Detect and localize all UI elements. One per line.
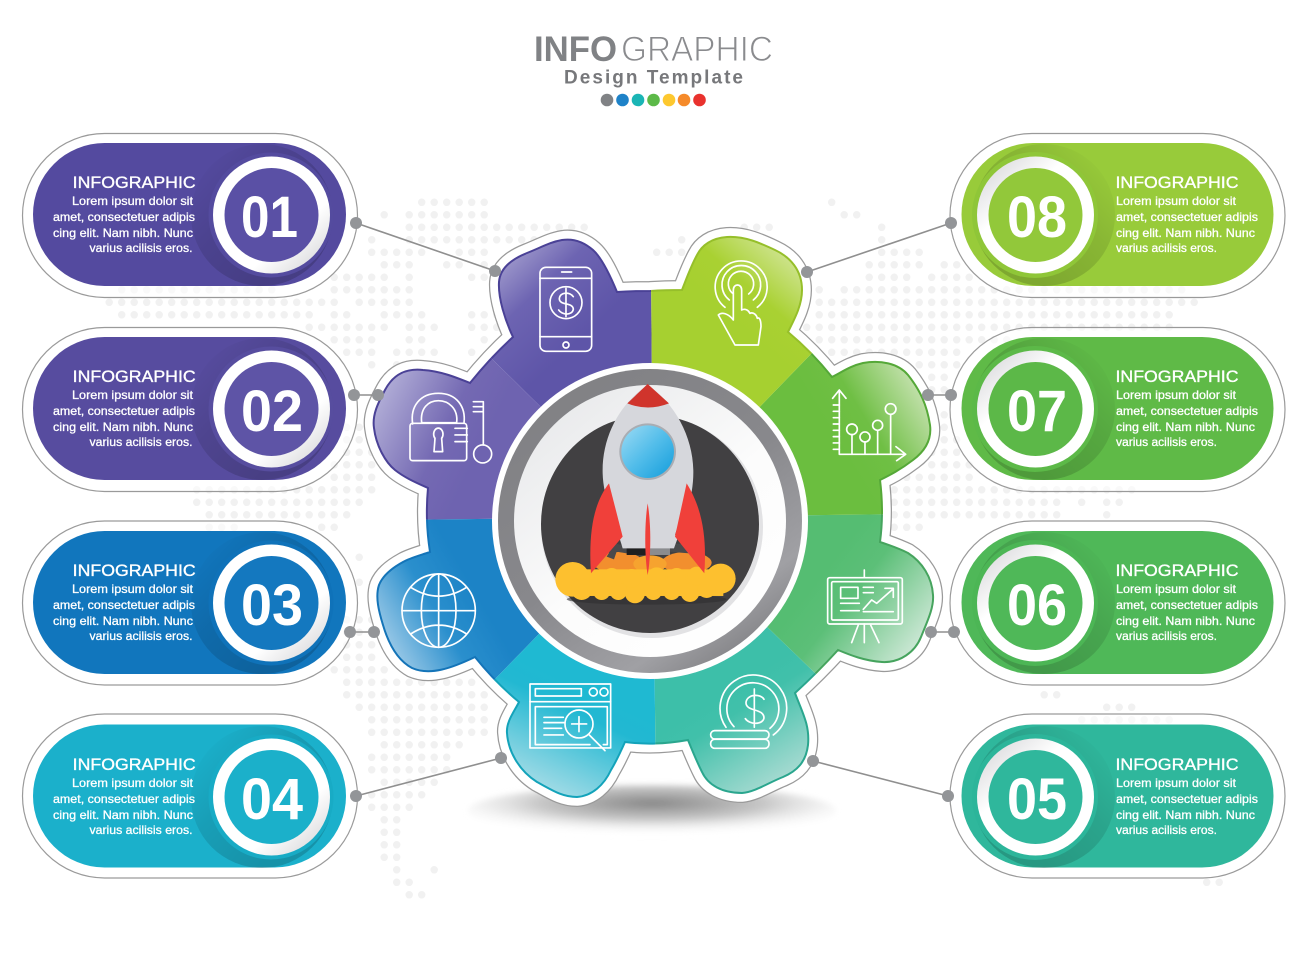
text block 05: INFOGRAPHIC [1116,755,1238,774]
world map dot background [109,202,1219,895]
gear segment 3 [376,518,540,680]
text block 02: cing elit. Nam nibh. Nunc [53,420,193,434]
rocket window [619,423,676,480]
gear ground shadow [468,785,836,837]
icon: touch gesture [715,261,767,345]
text block 06: Lorem ipsum dolor sit [1116,582,1237,596]
gear segment 2 [372,358,540,520]
number 03: 03 [241,573,303,638]
panel: card 04 [22,714,358,878]
rocket nose [627,384,669,407]
text block 04: Lorem ipsum dolor sit [72,776,194,790]
rocket body [603,385,693,548]
icon: presentation board [828,570,902,643]
rocket fins [590,483,705,575]
connector 03 [344,626,380,638]
text block 01: amet, consectetuer adipis [53,210,195,224]
text block 03: amet, consectetuer adipis [53,598,195,612]
text block 05: Lorem ipsum dolor sit [1116,776,1237,790]
title [534,30,773,88]
number 04: 04 [241,767,303,832]
text block 02 [53,367,196,449]
text block 04: INFOGRAPHIC [73,755,196,774]
text block 05: cing elit. Nam nibh. Nunc [1116,808,1255,822]
panel: card 03 [22,521,358,685]
connector 05 [807,755,954,802]
icon: rocket [555,384,736,605]
text block 03: Lorem ipsum dolor sit [72,582,194,596]
panel: card 07 [950,328,1285,492]
icon: dollar coin stack [711,675,787,748]
centre hub [492,363,808,679]
text block 03 [53,561,196,643]
text block 04: amet, consectetuer adipis [53,792,195,806]
text block 01: Lorem ipsum dolor sit [72,194,194,208]
colour dots row [601,94,706,106]
number 08: 08 [1007,185,1067,250]
text block 01: varius acilisis eros. [90,241,192,255]
rocket base [627,548,670,555]
text block 07 [1116,367,1258,449]
text block 07: INFOGRAPHIC [1116,367,1238,386]
text block 06: varius acilisis eros. [1116,629,1217,643]
icon: globe [402,574,475,647]
text block 07: amet, consectetuer adipis [1116,404,1258,418]
rocket legs [607,543,690,559]
icon: smartphone with dollar [540,267,592,351]
gear segment 1 [490,238,652,407]
panel: card 02 [22,328,358,492]
title: INFO [534,30,617,69]
connector 08 [801,217,957,278]
text block 07: varius acilisis eros. [1116,435,1217,449]
gear segment 6 [767,514,934,674]
number 06: 06 [1007,573,1067,638]
connector 07 [922,389,957,401]
gear segment 7 [760,353,932,516]
number 01: 01 [241,185,298,250]
icon: browser search [530,684,611,751]
text block 06: cing elit. Nam nibh. Nunc [1116,614,1255,628]
panel: card 08 [950,134,1285,298]
text block 01 [53,173,196,255]
text block 05 [1116,755,1258,837]
text block 08: varius acilisis eros. [1116,241,1217,255]
text block 07: cing elit. Nam nibh. Nunc [1116,420,1255,434]
text block 05: amet, consectetuer adipis [1116,792,1258,806]
text block 05: varius acilisis eros. [1116,823,1217,837]
text block 07: Lorem ipsum dolor sit [1116,388,1237,402]
panel: card 06 [950,521,1285,685]
text block 03: INFOGRAPHIC [73,561,196,580]
gear segment 8 [651,236,812,407]
text block 02: INFOGRAPHIC [73,367,196,386]
connector 04 [350,752,507,802]
title: Design Template [564,68,743,88]
connector 02 [348,389,384,401]
gear segment 5 [654,627,816,794]
connector 06 [925,626,960,638]
text block 08: amet, consectetuer adipis [1116,210,1258,224]
text block 03: varius acilisis eros. [90,629,192,643]
text block 02: amet, consectetuer adipis [53,404,195,418]
title: GRAPHIC [621,30,773,69]
text block 01: cing elit. Nam nibh. Nunc [53,226,193,240]
text block 06: INFOGRAPHIC [1116,561,1238,580]
panel: card 05 [950,714,1285,878]
text block 04: cing elit. Nam nibh. Nunc [53,808,193,822]
text block 08: Lorem ipsum dolor sit [1116,194,1237,208]
text block 02: varius acilisis eros. [90,435,192,449]
text block 04: varius acilisis eros. [90,823,192,837]
icon: padlock and key [410,393,492,463]
text block 08 [1116,173,1258,255]
number 02: 02 [241,379,303,444]
text block 04 [53,755,196,837]
rocket exhaust [555,552,736,605]
number 07: 07 [1007,379,1067,444]
gear segment 4 [494,634,656,798]
text block 06 [1116,561,1258,643]
text block 08: cing elit. Nam nibh. Nunc [1116,226,1255,240]
icon: line chart [833,390,906,461]
panel: card 01 [22,134,358,298]
text block 06: amet, consectetuer adipis [1116,598,1258,612]
gear outline [374,237,933,797]
text block 02: Lorem ipsum dolor sit [72,388,194,402]
text block 08: INFOGRAPHIC [1116,173,1238,192]
text block 01: INFOGRAPHIC [73,173,196,192]
text block 03: cing elit. Nam nibh. Nunc [53,614,193,628]
number 05: 05 [1007,767,1067,832]
connector 01 [350,217,501,277]
